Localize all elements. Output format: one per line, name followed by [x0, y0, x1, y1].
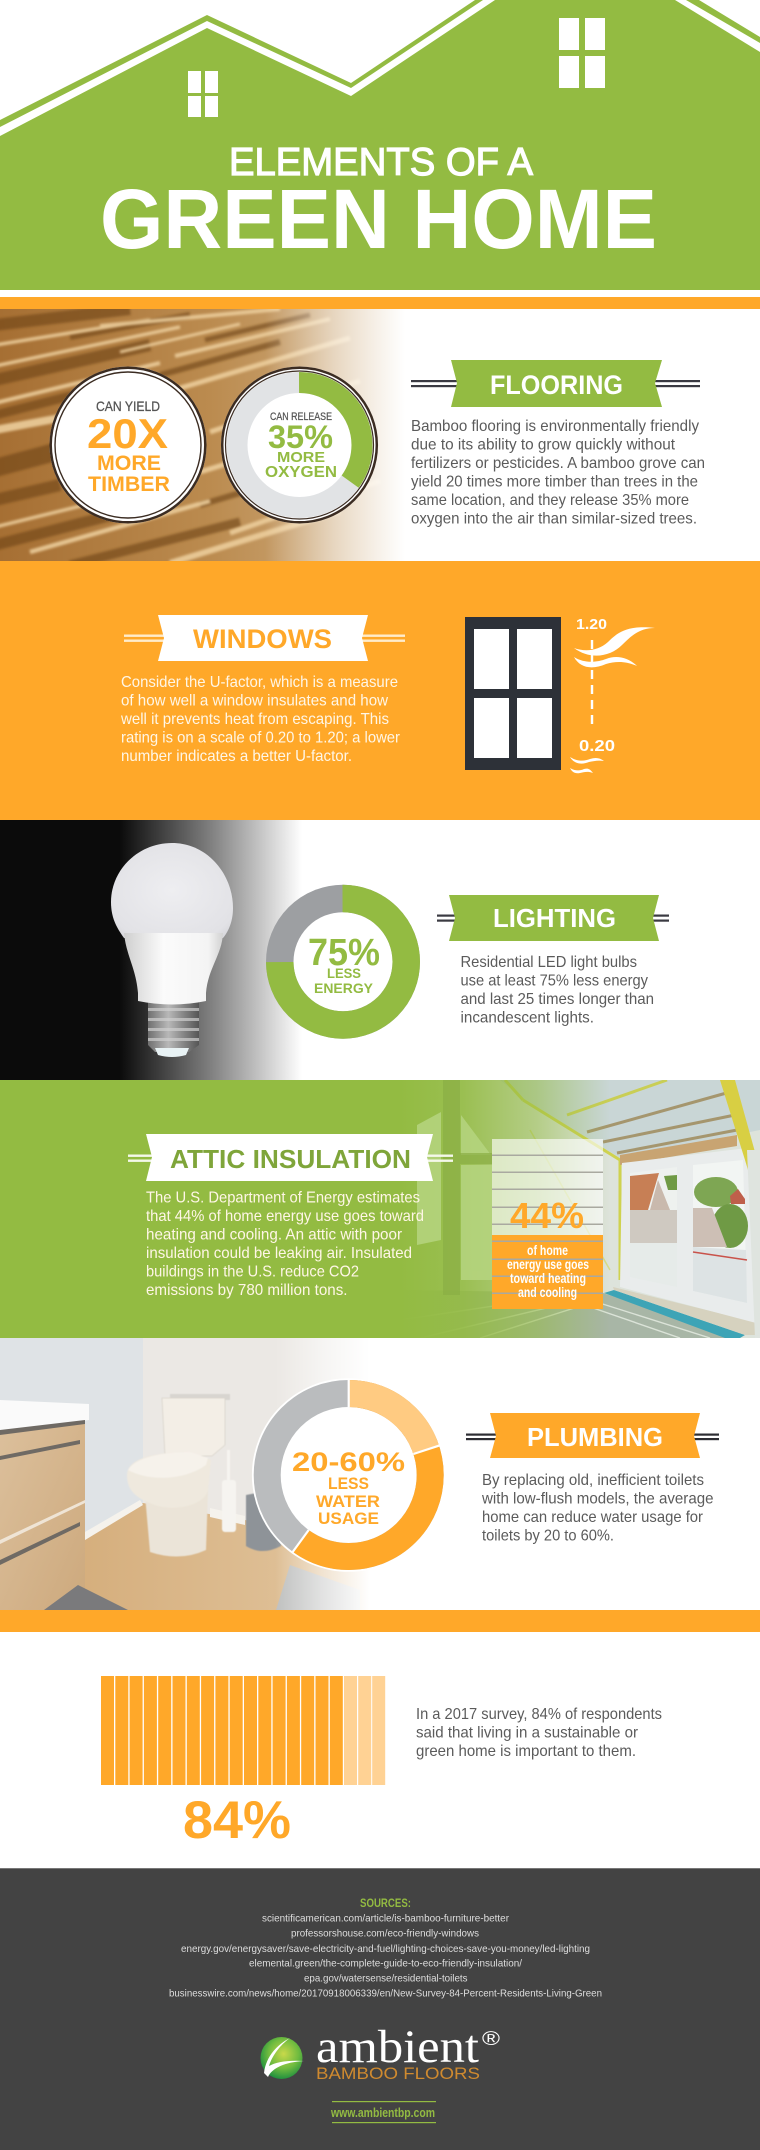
- text: flooring description: same location, and they release 35% more: [411, 492, 689, 509]
- text: lighting description: and last 25 times longer than: [460, 991, 654, 1008]
- text: plumbing description: with low-flush models, the average: [481, 1490, 714, 1508]
- icon: large roof window: [559, 18, 605, 88]
- website link: www.ambientbp.com: [330, 2106, 435, 2120]
- sources heading: SOURCES:: [360, 1898, 411, 1910]
- text: survey description: [416, 1706, 662, 1760]
- photo: bamboo wood floor: [0, 309, 420, 565]
- orange divider: [0, 1610, 760, 1632]
- panel: attic insulation: [0, 1080, 760, 1338]
- text: plumbing description: By replacing old, inefficient toilets: [482, 1472, 704, 1489]
- toilet brush: [222, 1480, 236, 1532]
- text: flooring description: due to its ability to grow quickly without: [411, 436, 676, 454]
- text: windows description: rating is on a scale of 0.20 to 1.20; a lower: [121, 730, 401, 746]
- chart: 20-60% less water usage donut: [252, 1378, 446, 1572]
- circle: can yield 20x more timber: TIMBER: [88, 473, 170, 496]
- chart: 35% more oxygen donut: [221, 366, 378, 524]
- text: lighting description: use at least 75% less energy: [460, 972, 648, 990]
- panel: survey: [101, 1676, 662, 1850]
- heading: plumbing banner: [466, 1413, 719, 1458]
- diagram: u-factor scale: 1.20: [576, 616, 607, 633]
- chart: 84% striped bar: [101, 1676, 385, 1785]
- photo: attic room with insulation and window: [400, 1080, 760, 1338]
- chart: 44% stacked bar card: and cooling: [518, 1285, 577, 1300]
- text: flooring description: oxygen into the air than similar-sized trees.: [411, 510, 697, 528]
- text: attic insulation description: [146, 1190, 424, 1299]
- trash can: [246, 1490, 281, 1551]
- website link: [330, 2101, 436, 2123]
- text: flooring description: Bamboo flooring is environmentally friendly: [411, 418, 699, 435]
- text: sources list: scientificamerican.com/article/is-bamboo-furniture-better: [262, 1912, 509, 1924]
- chart: 75% less energy donut: 75%: [308, 932, 380, 974]
- heading: attic insulation banner: [128, 1134, 453, 1181]
- circle: can yield 20x more timber: [50, 366, 206, 524]
- text: survey description: said that living in a sustainable or: [416, 1724, 639, 1742]
- text: flooring description: yield 20 times more timber than trees in the: [411, 474, 698, 490]
- chart: 44% stacked bar card: 44%: [510, 1195, 584, 1236]
- text: windows description: Consider the U-factor, which is a measure: [121, 674, 398, 691]
- chart: 75% less energy donut: [280, 898, 406, 1025]
- chart: 35% more oxygen donut: OXYGEN: [265, 464, 337, 481]
- text: attic insulation description: The U.S. Department of Energy estimates: [146, 1190, 420, 1206]
- text: plumbing description: [481, 1472, 714, 1544]
- text: attic insulation description: that 44% of home energy use goes toward: [146, 1208, 424, 1225]
- text: sources list: professorshouse.com/eco-friendly-windows: [291, 1928, 479, 1940]
- heading: flooring banner: [411, 360, 700, 407]
- heading: windows banner: WINDOWS: [193, 624, 332, 654]
- heading: attic insulation banner: ATTIC INSULATION: [170, 1144, 411, 1174]
- chart: 20-60% less water usage donut: 20-60%: [292, 1447, 405, 1477]
- heading: flooring banner: FLOORING: [490, 370, 623, 400]
- diagram: u-factor scale: 0.20: [579, 738, 615, 755]
- left window pane: [630, 1173, 677, 1243]
- logo: ambient bamboo floors: ®: [482, 2029, 500, 2050]
- text: sources list: energy.gov/energysaver/save-electricity-and-fuel/lighting-choices-save-you-money/led-lighting: [181, 1943, 590, 1955]
- text: lighting description: incandescent lights.: [460, 1010, 594, 1026]
- icon: small roof window: [188, 71, 218, 117]
- title: ELEMENTS OF A: [229, 141, 533, 184]
- circle: can yield 20x more timber: MORE: [97, 452, 161, 475]
- stat: 84%: 84%: [183, 1791, 291, 1850]
- text: windows description: [120, 674, 401, 765]
- photo: led light bulb: [111, 843, 233, 1057]
- right window pane: [693, 1160, 748, 1303]
- logo: ambient bamboo floors: [260, 2021, 500, 2083]
- chart: 35% more oxygen donut: MORE: [277, 449, 325, 466]
- text: sources list: elemental.green/the-complete-guide-to-eco-friendly-insulation/: [249, 1958, 522, 1970]
- toilet: [170, 1394, 230, 1400]
- chart: 75% less energy donut: LESS: [327, 965, 361, 981]
- heading: plumbing banner: PLUMBING: [527, 1422, 663, 1452]
- text: sources list: epa.gov/watersense/residential-toilets: [304, 1972, 468, 1984]
- header: green house roof: [0, 0, 760, 290]
- text: lighting description: [460, 954, 654, 1026]
- heading: lighting banner: [437, 895, 669, 941]
- circle: can yield 20x more timber: CAN YIELD: [96, 398, 160, 414]
- text: plumbing description: home can reduce water usage for: [482, 1509, 704, 1526]
- panel: flooring: [0, 309, 705, 565]
- text: windows description: number indicates a better U-factor.: [121, 748, 352, 765]
- chart: 20-60% less water usage donut: LESS: [328, 1474, 369, 1493]
- text: windows description: of how well a window insulates and how: [121, 692, 388, 710]
- text: attic insulation description: insulation could be leaking air. Insulated: [146, 1245, 412, 1262]
- text: flooring description: fertilizers or pesticides. A bamboo grove can: [411, 455, 705, 472]
- text: plumbing description: toilets by 20 to 60%.: [482, 1528, 614, 1544]
- chart: 20-60% less water usage donut: USAGE: [318, 1509, 379, 1528]
- heading: windows banner: [124, 615, 405, 661]
- text: attic insulation description: emissions by 780 million tons.: [146, 1282, 348, 1299]
- chart: 35% more oxygen donut: 35%: [268, 419, 333, 455]
- icon: window: [465, 617, 561, 770]
- text: sources list: businesswire.com/news/home/20170918006339/en/New-Survey-84-Percent-Residents-Living-Green: [169, 1988, 602, 2000]
- text: windows description: well it prevents heat from escaping. This: [120, 711, 389, 728]
- text: survey description: green home is important to them.: [416, 1743, 636, 1760]
- logo: ambient bamboo floors: ambient: [316, 2021, 479, 2073]
- chart: 75% less energy donut: ENERGY: [314, 980, 374, 996]
- chart: 44% stacked bar card: energy use goes: [507, 1257, 589, 1272]
- text: lighting description: Residential LED light bulbs: [460, 954, 637, 971]
- chart: 44% stacked bar card: of home: [527, 1243, 568, 1258]
- vanity cabinet: [0, 1420, 85, 1610]
- text: survey description: In a 2017 survey, 84% of respondents: [416, 1706, 662, 1723]
- heading: lighting banner: LIGHTING: [493, 903, 616, 933]
- text: sources list: [169, 1912, 602, 2000]
- chart: 44% stacked bar card: [492, 1139, 603, 1309]
- diagram: u-factor scale: [570, 616, 655, 773]
- text: flooring description: [411, 418, 705, 528]
- chart: 20-60% less water usage donut: WATER: [316, 1492, 380, 1511]
- panel: windows: [0, 561, 760, 820]
- panel: lighting: [0, 820, 760, 1080]
- photo: bathroom with toilet and cabinet: [0, 1338, 400, 1610]
- chart: 35% more oxygen donut: CAN RELEASE: [270, 411, 332, 423]
- logo: ambient bamboo floors: BAMBOO FLOORS: [316, 2064, 480, 2083]
- text: attic insulation description: buildings in the U.S. reduce CO2: [146, 1264, 359, 1280]
- text: attic insulation description: heating and cooling. An attic with poor: [146, 1226, 403, 1244]
- panel: footer: [0, 1868, 760, 2150]
- orange divider under header: [0, 297, 760, 309]
- panel: plumbing: [0, 1338, 760, 1610]
- title: GREEN HOME: [100, 172, 657, 266]
- chart: 44% stacked bar card: toward heating: [510, 1271, 586, 1286]
- circle: can yield 20x more timber: 20X: [87, 410, 168, 457]
